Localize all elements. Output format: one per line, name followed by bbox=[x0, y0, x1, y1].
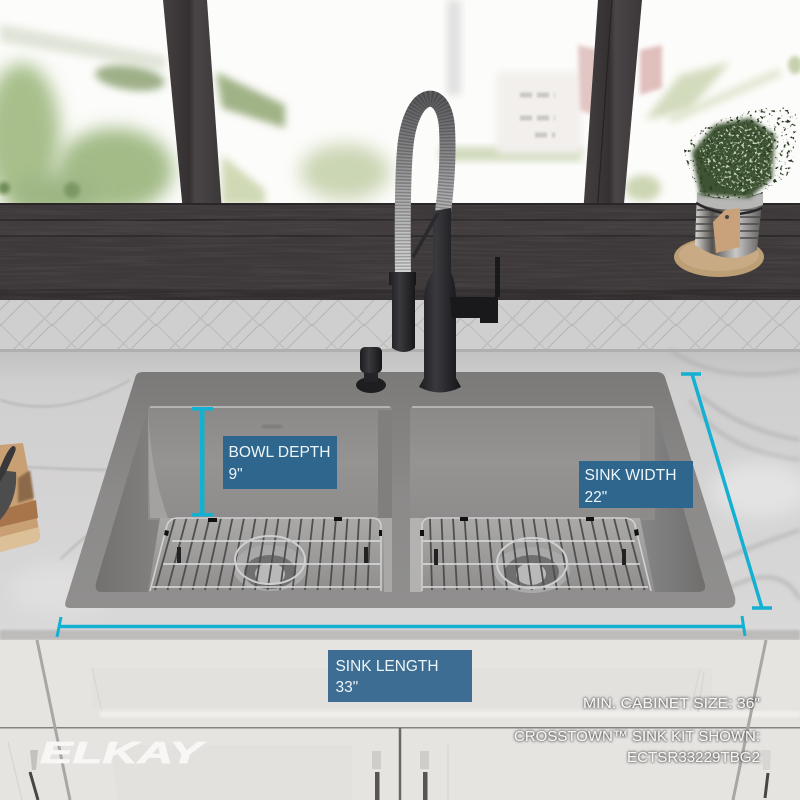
lever handle bbox=[450, 257, 500, 323]
cabinet handles bbox=[30, 750, 771, 800]
label: sink length: SINK LENGTH bbox=[336, 658, 438, 675]
left wire rack and strainer bbox=[150, 517, 382, 591]
faucet body bbox=[419, 208, 461, 392]
right bowl bbox=[410, 407, 705, 592]
cork coaster bbox=[674, 237, 764, 277]
cabinet size and kit model note: MIN. CABINET SIZE: 36" bbox=[583, 695, 760, 712]
spout strut bbox=[413, 213, 438, 257]
label: sink length: 33" bbox=[336, 679, 358, 696]
cabinets bbox=[0, 640, 800, 800]
dimension line: bowl depth bbox=[192, 407, 213, 516]
dimension line: sink width bbox=[681, 374, 772, 608]
cutting board with bowl bbox=[0, 443, 40, 552]
window view background bbox=[0, 0, 800, 217]
potted herb bbox=[674, 107, 798, 277]
right wire rack and strainer bbox=[420, 517, 651, 593]
window sill and wooden ledge bbox=[0, 203, 800, 300]
flexible spout bbox=[403, 99, 448, 275]
cabinet size and kit model note bbox=[514, 695, 760, 766]
Elkay logo: ELKAY bbox=[40, 735, 207, 770]
tin can bbox=[695, 192, 763, 258]
label: sink length bbox=[328, 650, 472, 702]
cabinet size and kit model note: ECTSR33229TBG2 bbox=[627, 749, 760, 766]
kraft tag bbox=[713, 208, 740, 253]
soap dispenser bbox=[356, 347, 386, 393]
spray head dock bbox=[389, 272, 416, 352]
marble countertop bbox=[0, 349, 800, 640]
cabinet size and kit model note: CROSSTOWN™ SINK KIT SHOWN: bbox=[514, 728, 760, 745]
window frame mullions bbox=[163, 0, 642, 215]
sink bbox=[65, 372, 735, 608]
sink deck bbox=[65, 372, 735, 608]
dimension line: sink length bbox=[57, 616, 745, 637]
label: sink width: 22" bbox=[584, 489, 607, 506]
label: sink width: SINK WIDTH bbox=[584, 467, 676, 484]
left bowl bbox=[96, 407, 392, 592]
label: bowl depth bbox=[223, 436, 337, 489]
stone bowl bbox=[0, 470, 16, 520]
foliage bbox=[684, 107, 798, 198]
herringbone backsplash bbox=[0, 300, 800, 349]
label: sink width bbox=[579, 461, 693, 508]
pestle bbox=[0, 446, 16, 482]
label: bowl depth: BOWL DEPTH bbox=[228, 444, 330, 461]
label: bowl depth: 9" bbox=[228, 466, 243, 483]
faucet bbox=[389, 99, 500, 393]
